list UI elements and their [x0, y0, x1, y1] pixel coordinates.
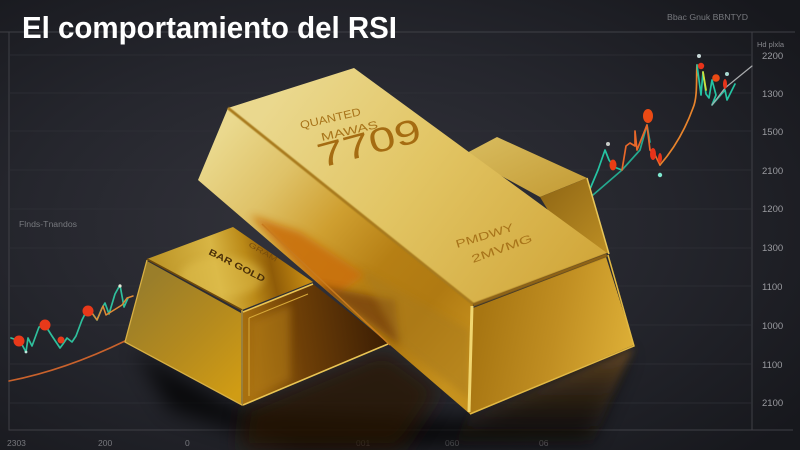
end face: [470, 257, 634, 414]
chart label left: Flnds-Tnandos: [19, 220, 77, 229]
gold bar: small front left: [125, 227, 388, 405]
y axis labels: 1200: [762, 204, 783, 215]
gold bar: large centre: [198, 68, 634, 414]
y axis labels: 1500: [762, 127, 783, 138]
y axis labels: [757, 40, 785, 409]
x axis labels: 2303: [7, 438, 26, 448]
gold bar: small front left: GRAM: [247, 242, 278, 264]
gold bar: large centre: MAWAS: [320, 119, 379, 144]
line chart left: [9, 284, 133, 381]
line chart right: [590, 54, 752, 195]
y axis labels: 1300: [762, 89, 783, 100]
y axis labels: 2100: [762, 398, 783, 409]
gold bar: large centre: PMDWY: [454, 222, 516, 251]
floor shadows and reflections: [135, 347, 634, 450]
gold bar: large centre: 7709: [313, 112, 425, 176]
x axis labels: 200: [98, 438, 112, 448]
gold bar: back: [463, 137, 609, 254]
y axis labels: 1100: [762, 282, 782, 293]
long side face: [198, 108, 473, 414]
top face: [147, 227, 313, 310]
x axis labels: 06: [539, 438, 549, 448]
bevel edges: [228, 108, 473, 304]
y axis labels: Hd plxla: [757, 40, 785, 49]
gold bar: large centre: 2MVMG: [470, 233, 534, 266]
orange reflection: [250, 215, 470, 400]
x axis labels: 0: [185, 438, 190, 448]
chart heading top right: Bbac Gnuk BBNTYD: [667, 13, 748, 22]
x axis labels: 001: [356, 438, 370, 448]
y axis labels: 2100: [762, 166, 783, 177]
title: El comportamiento del RSI: [22, 10, 397, 45]
top face: [228, 68, 607, 304]
end face: [243, 284, 388, 405]
x axis labels: 060: [445, 438, 459, 448]
y axis labels: 1300: [762, 243, 783, 254]
stamped text: BAR GOLD: [207, 247, 267, 284]
y axis labels: 1000: [762, 321, 783, 332]
y axis labels: 2200: [762, 51, 783, 62]
y axis labels: 1100: [762, 360, 782, 371]
x axis labels: [7, 438, 549, 448]
left face: [125, 261, 241, 405]
stamped text: QUANTED: [299, 106, 362, 132]
